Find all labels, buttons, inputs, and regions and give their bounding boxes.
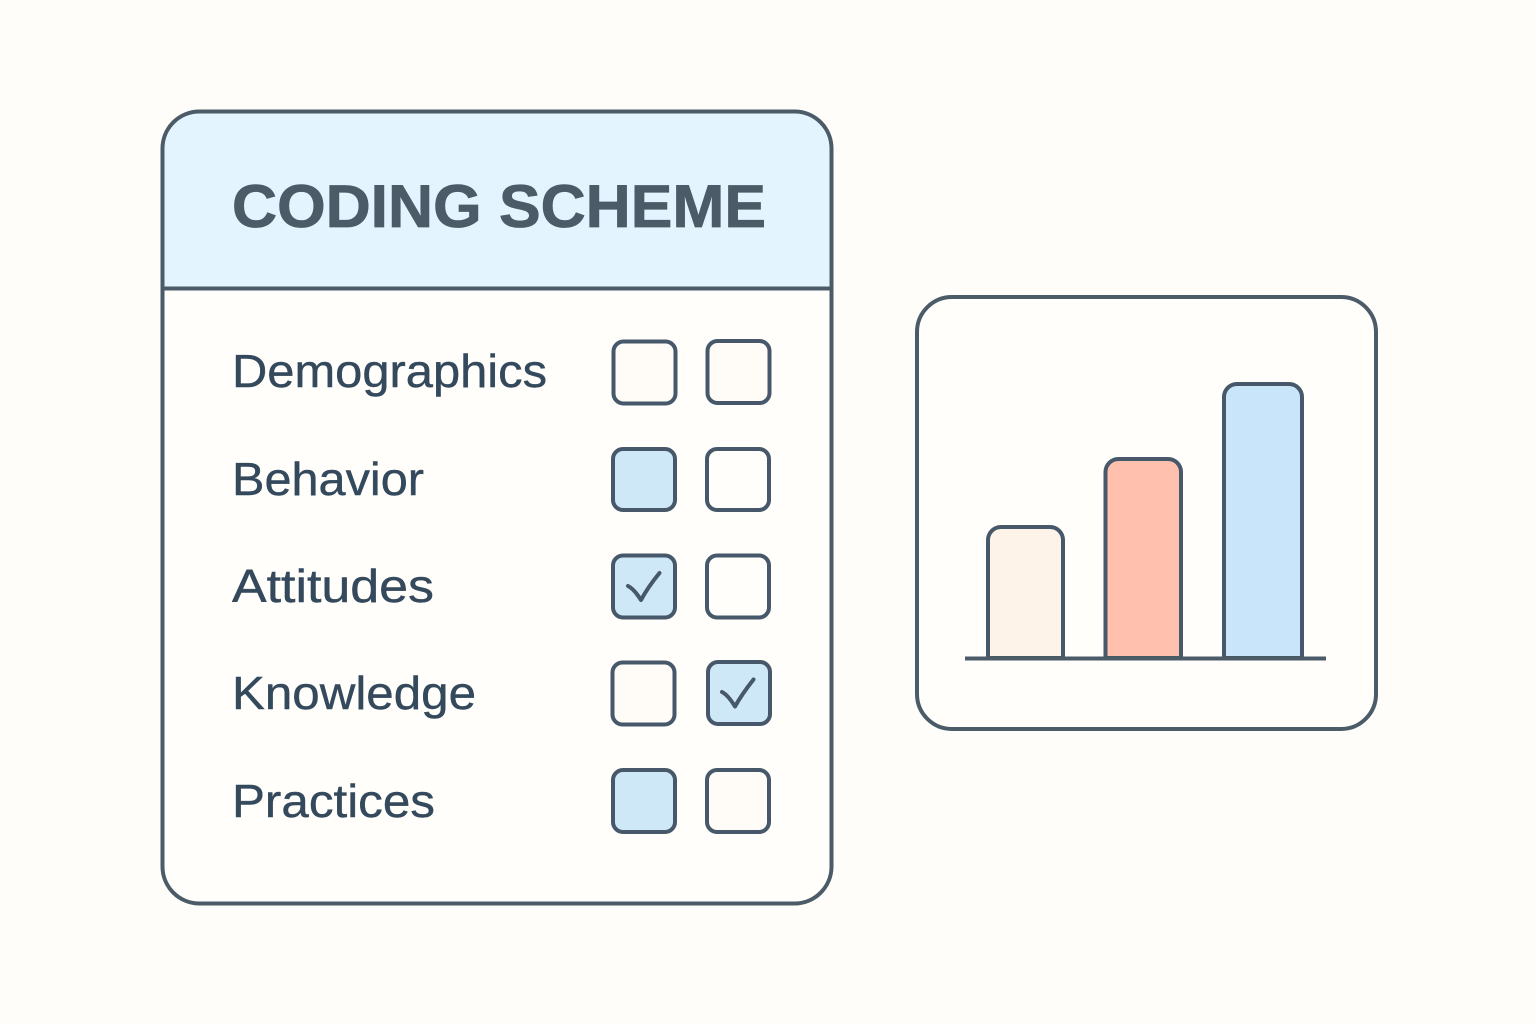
bar: salmon <box>1106 459 1181 658</box>
row: demographics <box>232 341 770 404</box>
row: practices: Practices <box>232 775 435 827</box>
row: attitudes <box>232 556 769 618</box>
bar: blue <box>1224 384 1302 658</box>
panel: coding scheme card <box>162 112 832 904</box>
heading: coding scheme: CODING SCHEME <box>232 173 766 240</box>
row: attitudes: Attitudes <box>232 560 434 612</box>
row: practices <box>232 770 769 832</box>
row: knowledge: Knowledge <box>232 667 476 719</box>
row: demographics: Demographics <box>232 345 547 397</box>
chart baseline <box>965 656 1326 660</box>
panel: bar chart card <box>917 297 1376 729</box>
row: knowledge <box>232 662 770 724</box>
card header band <box>162 112 832 288</box>
row: behavior: Behavior <box>232 453 424 505</box>
bar: cream <box>988 527 1063 658</box>
row: behavior <box>232 449 769 510</box>
